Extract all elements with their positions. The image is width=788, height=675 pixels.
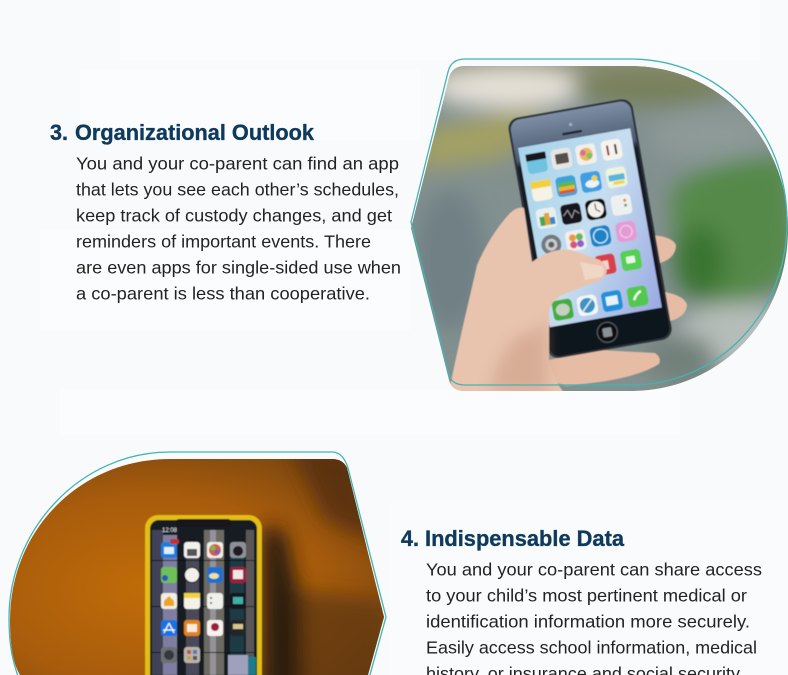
text block: section 4 body: to your child’s most pertinent medical or (426, 586, 747, 606)
status text: 12:08 (162, 528, 178, 534)
far fingers behind phone (548, 235, 687, 386)
app icons (161, 539, 246, 663)
text block: section 3 body (76, 154, 401, 304)
palm shading (490, 320, 547, 395)
heading: 3. Organizational Outlook: Organizational Outlook (75, 120, 315, 145)
heading: 3. Organizational Outlook: 3. (50, 120, 68, 145)
text block: section 4 body: You and your co-parent can share access (426, 560, 762, 580)
text block: section 4 body: Easily access school information, medical (426, 638, 757, 658)
notch (176, 518, 230, 521)
smartphone (507, 98, 673, 360)
text block: section 3 body: are even apps for single-sided use when (76, 258, 401, 278)
photo: hand holding smartphone (400, 50, 788, 400)
text block: section 4 body (426, 560, 762, 675)
heading: 4. Indispensable Data: 4. (401, 526, 419, 551)
orange surface (10, 459, 384, 675)
hand and thumb (448, 208, 607, 395)
app icons (525, 138, 649, 321)
text block: section 4 body: identification information more securely. (426, 612, 750, 632)
thumb highlight (580, 262, 604, 280)
text block: section 3 body: a co-parent is less than cooperative. (76, 284, 370, 304)
text block: section 3 body: You and your co-parent can find an app (76, 154, 399, 174)
wallpaper stripes (152, 530, 256, 675)
teal outline around photo 4 (9, 452, 386, 675)
teal outline around photo 3 (411, 59, 787, 385)
text block: section 3 body: reminders of important events. There (76, 232, 371, 252)
heading: 4. Indispensable Data: Indispensable Data (425, 526, 625, 551)
text block: section 3 body: that lets you see each other’s schedules, (76, 180, 399, 200)
photo backdrop: blurred outdoor scene (400, 50, 788, 400)
yellow smartphone (145, 515, 262, 675)
text block: section 3 body: keep track of custody changes, and get (76, 206, 392, 226)
photo: yellow phone on orange surface (10, 459, 384, 675)
